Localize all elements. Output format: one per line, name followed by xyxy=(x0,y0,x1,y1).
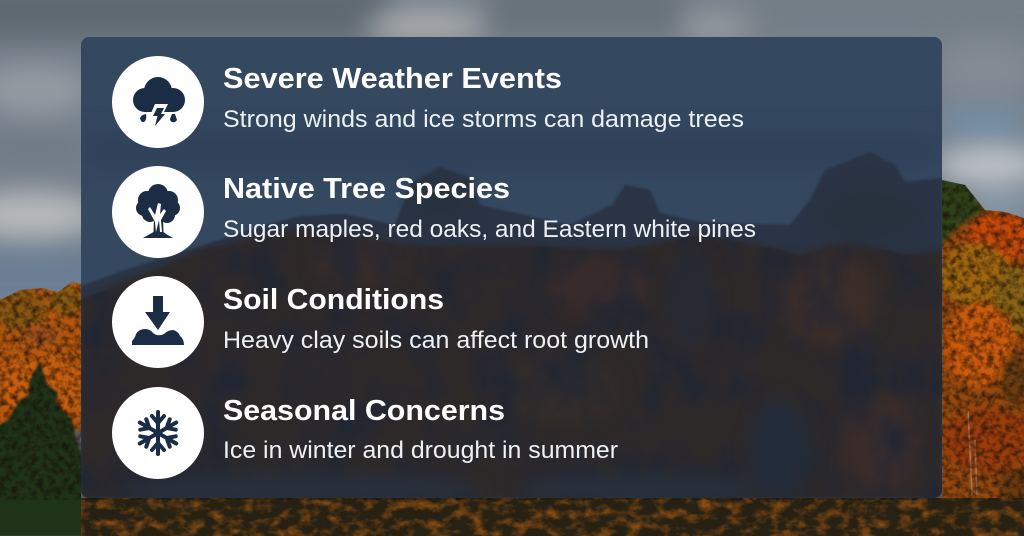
heading: Seasonal Concerns xyxy=(223,395,505,427)
row: seasonal concerns xyxy=(112,387,618,479)
background: autumn forest left xyxy=(0,282,81,536)
icon: soil with down arrow xyxy=(112,276,204,368)
heading: Native Tree Species xyxy=(223,173,510,205)
background: autumn forest right xyxy=(942,180,1024,498)
background: foreground treeline strip xyxy=(81,498,1024,536)
description: Heavy clay soils can affect root growth xyxy=(223,327,649,354)
row: native tree species xyxy=(112,166,756,258)
description: Ice in winter and drought in summer xyxy=(223,437,618,464)
row: soil conditions xyxy=(112,276,649,368)
description: Sugar maples, red oaks, and Eastern white pines xyxy=(223,216,756,243)
background: foliage texture xyxy=(0,180,1024,500)
row: severe weather events xyxy=(112,56,744,148)
description: Strong winds and ice storms can damage trees xyxy=(223,106,744,133)
icon: snowflake xyxy=(112,387,204,479)
background: cloudy sky xyxy=(0,0,1024,310)
panel: factor list xyxy=(81,37,942,506)
icon: pine tree xyxy=(0,362,90,536)
icon: tree xyxy=(112,166,204,258)
icon: storm cloud xyxy=(112,56,204,148)
heading: Soil Conditions xyxy=(223,284,444,316)
heading: Severe Weather Events xyxy=(223,63,562,95)
